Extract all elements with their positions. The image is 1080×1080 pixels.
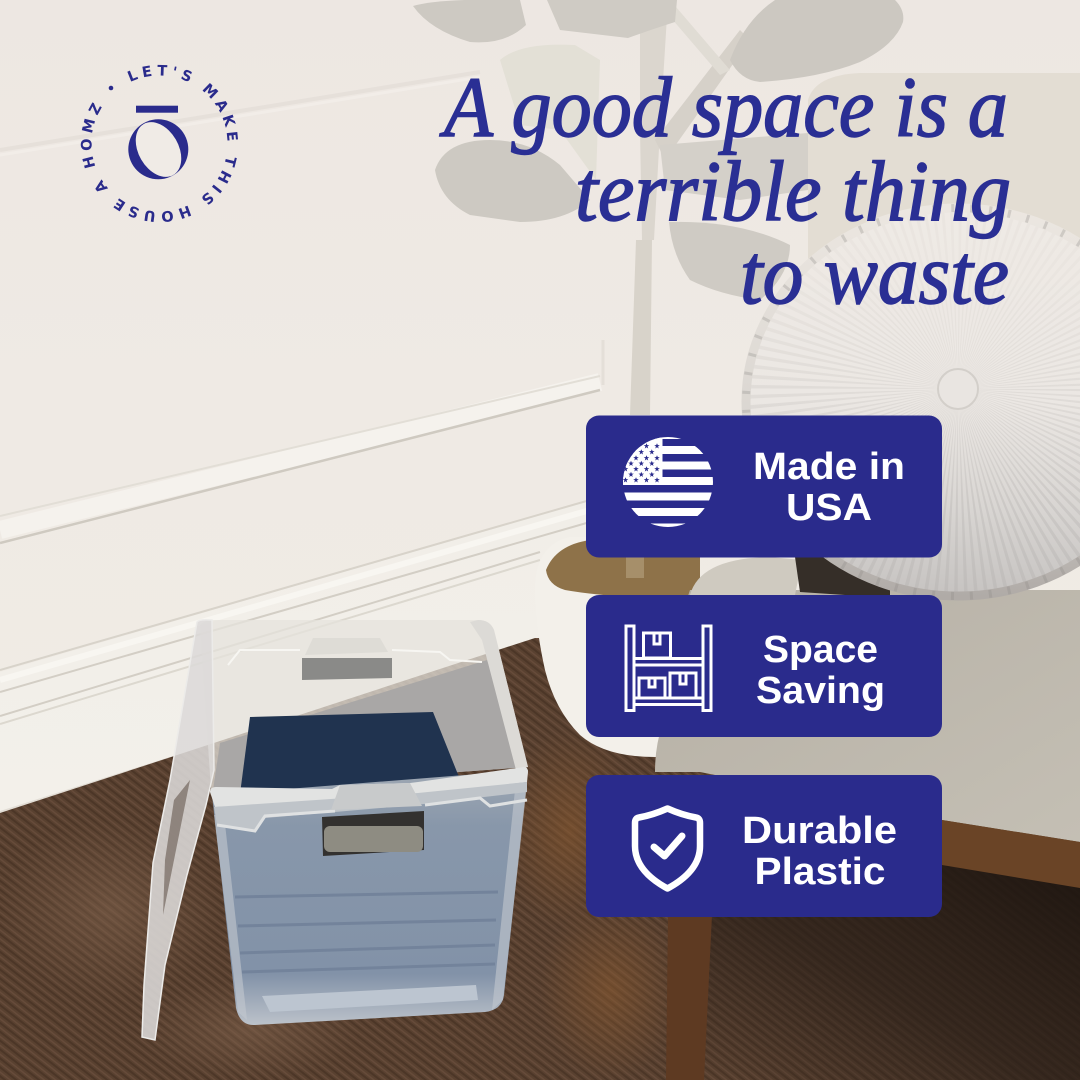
bin body translucent side edges bbox=[214, 785, 527, 1020]
label: Made in bbox=[753, 446, 905, 488]
icon: US flag bbox=[623, 437, 713, 528]
logo ring text bbox=[91, 75, 228, 212]
icon: shield with check bbox=[635, 808, 700, 888]
label: Saving bbox=[756, 670, 885, 712]
logo badge: LET'S MAKE THIS HOUSE A HOMZ bbox=[80, 64, 238, 222]
label: Space bbox=[763, 629, 878, 671]
towel top bbox=[240, 712, 461, 794]
card: Made in USA bbox=[586, 416, 942, 558]
chair wooden rail bbox=[942, 820, 1080, 888]
chair arm bolster bbox=[690, 557, 802, 595]
card: Space Saving bbox=[586, 595, 942, 737]
chair back bbox=[808, 73, 1080, 420]
title: to waste bbox=[740, 226, 1009, 322]
round pillow bbox=[746, 208, 1080, 596]
floor tone patches bbox=[0, 820, 220, 1000]
logo macron bar bbox=[136, 106, 178, 113]
storage bin bbox=[142, 620, 528, 1040]
chair seat bbox=[655, 590, 1080, 842]
bin front body bbox=[212, 770, 528, 1025]
card: Durable Plastic bbox=[586, 775, 942, 917]
plant bbox=[413, 0, 903, 415]
back handle bbox=[302, 658, 392, 680]
icon: storage shelves bbox=[626, 626, 711, 710]
wall bbox=[0, 0, 1080, 830]
plant pot bbox=[535, 537, 700, 757]
title bbox=[439, 59, 1011, 322]
title: A good space is a bbox=[439, 59, 1008, 155]
chair leg bbox=[666, 915, 712, 1080]
bin rim bbox=[210, 767, 528, 807]
shadow under pillow bbox=[795, 557, 890, 598]
logo letter o bbox=[128, 119, 188, 179]
open lid bbox=[142, 620, 214, 1040]
title: terrible thing bbox=[575, 143, 1011, 239]
front handle bbox=[322, 811, 424, 856]
wood floor bbox=[0, 638, 1080, 1080]
baseboard bbox=[0, 500, 590, 813]
label: Durable bbox=[742, 810, 897, 852]
bin back and interior bbox=[200, 620, 528, 790]
wall panel mouldings bbox=[0, 72, 603, 543]
dark floor under chair bbox=[700, 860, 1080, 1080]
towel stack lines bbox=[235, 892, 498, 972]
label: Plastic bbox=[754, 851, 886, 893]
label: USA bbox=[786, 487, 872, 529]
